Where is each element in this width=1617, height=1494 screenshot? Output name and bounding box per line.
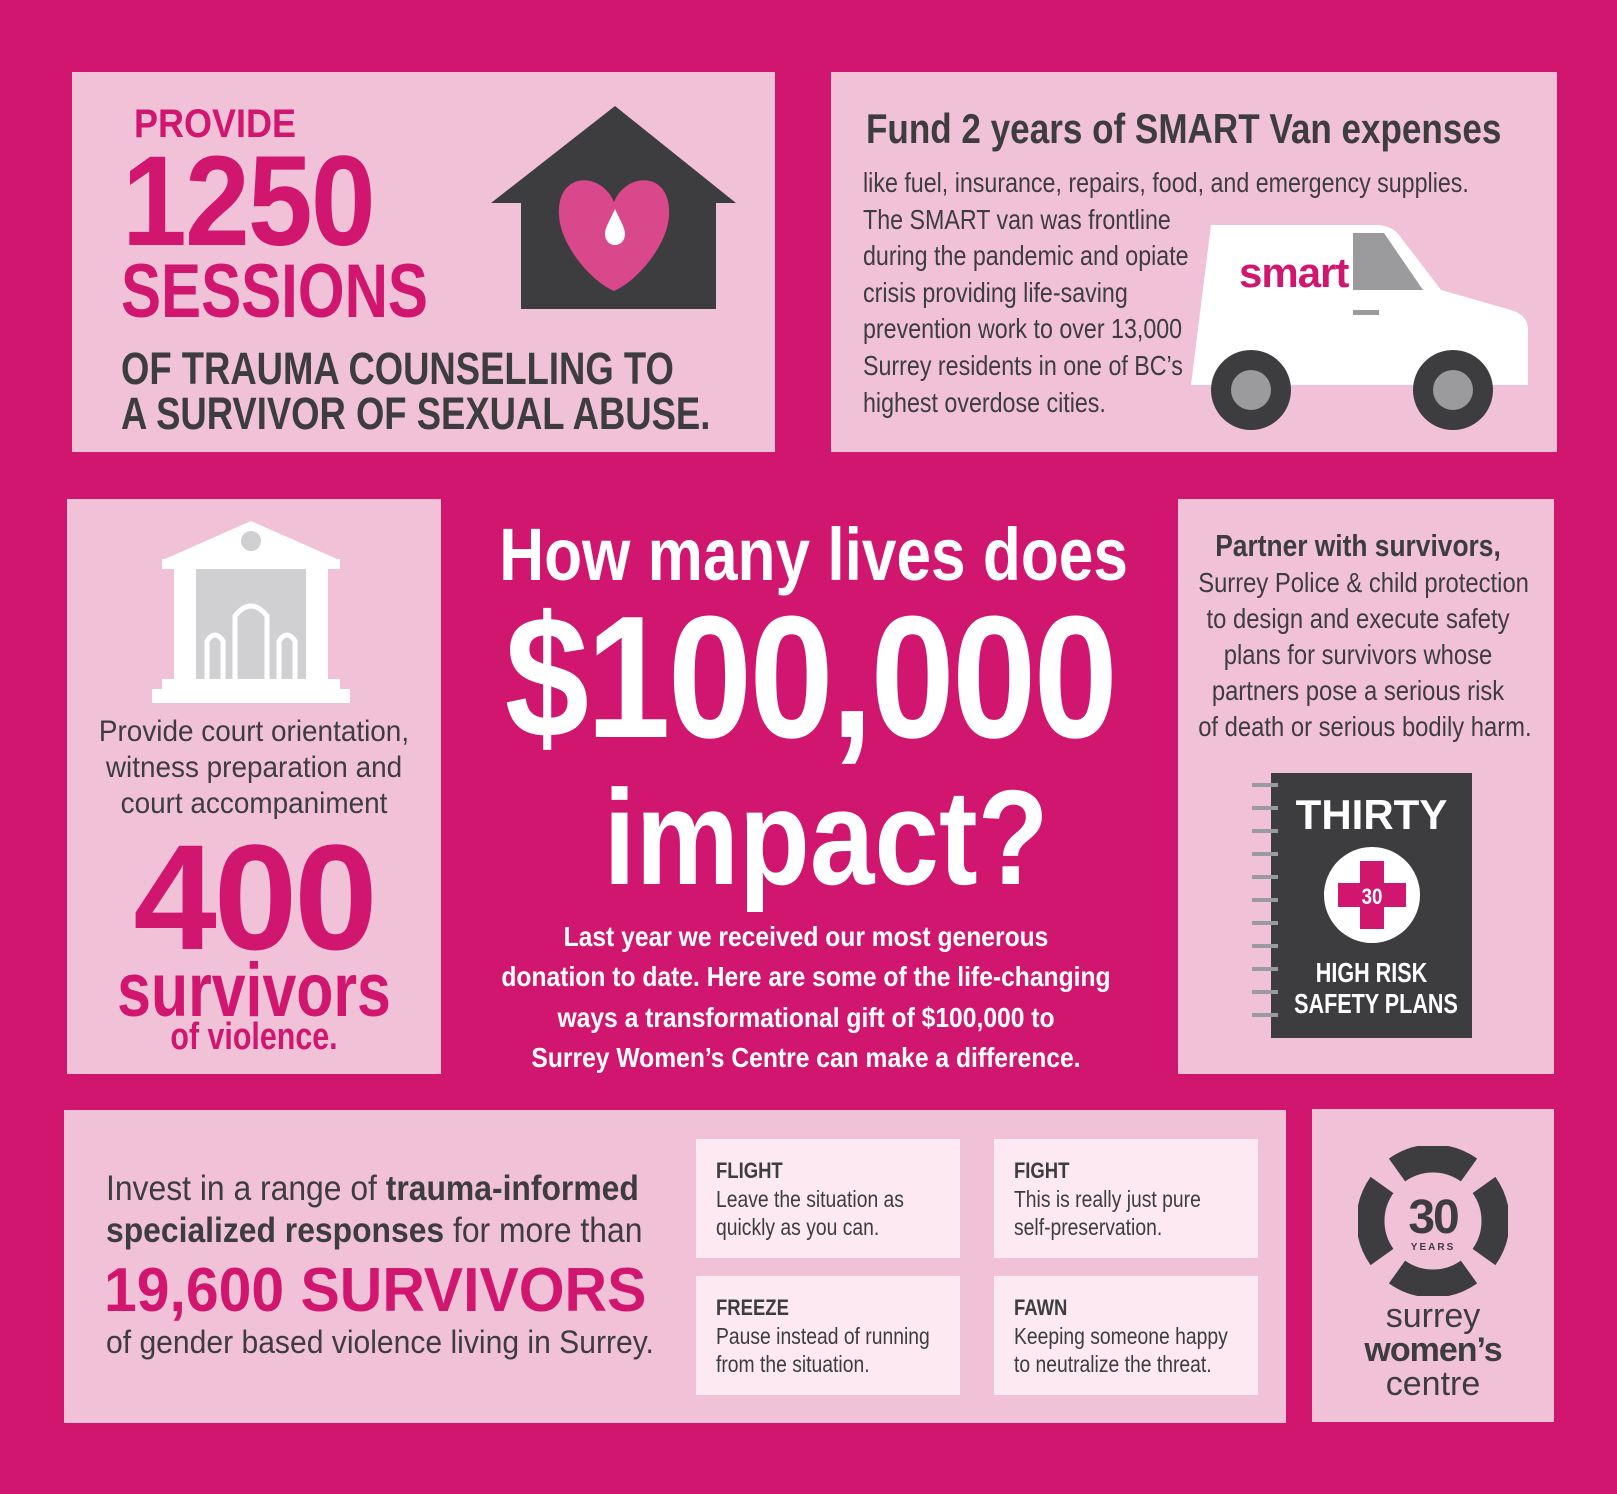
icon: house with heart — [491, 106, 736, 309]
box: fawn: FAWN — [1014, 1295, 1067, 1320]
panel: 1250 sessions — [72, 72, 775, 452]
text: intro paragraph: ways a transformational gift of $100,000 to — [557, 1002, 1055, 1033]
icon: courthouse — [152, 521, 350, 703]
icon: cross 30: 30 — [1362, 886, 1382, 909]
box: flight — [696, 1139, 960, 1258]
panel: logo — [1312, 1109, 1554, 1422]
icon: 30 years ring: 30 — [1408, 1191, 1458, 1244]
text: van description: prevention work to over 13,000 — [863, 313, 1182, 344]
text: van description: during the pandemic and opiate — [863, 240, 1189, 271]
text: gender based violence: of gender based violence living in Surrey. — [106, 1324, 654, 1360]
text: partner with survivors: to design and execute safety — [1207, 603, 1509, 634]
text: van description: The SMART van was frontline — [863, 204, 1171, 235]
text: van description: like fuel, insurance, repairs, food, and emergency supplies. — [863, 167, 1469, 198]
panel: SMART van — [831, 72, 1557, 452]
heading: impact: impact? — [603, 762, 1049, 913]
text: partner with survivors: of death or serious bodily harm. — [1198, 711, 1532, 742]
text: survivors of violence: survivors — [117, 948, 391, 1033]
number: $100,000: $100,000 — [505, 579, 1115, 774]
box: flight: FLIGHT — [716, 1158, 783, 1183]
text: surrey women's centre — [1364, 1297, 1502, 1403]
text: trauma counselling: A SURVIVOR OF SEXUAL ABUSE. — [121, 388, 710, 439]
box: fawn: Keeping someone happy — [1014, 1323, 1228, 1349]
number: 400: 400 — [133, 813, 375, 981]
title: center headline: How many lives does — [499, 513, 1128, 596]
text: van description: crisis providing life-saving — [863, 277, 1128, 308]
text: trauma counselling — [121, 343, 710, 439]
icon: 30 years ring — [1358, 1146, 1508, 1296]
text: partner with survivors: Surrey Police & child protection — [1198, 567, 1529, 598]
text: partner with survivors: Partner with survivors, — [1215, 528, 1501, 563]
text: intro paragraph: Surrey Women’s Centre can make a difference. — [531, 1042, 1081, 1073]
text: partner with survivors — [1198, 528, 1532, 742]
text: surrey women's centre: women’s — [1364, 1331, 1502, 1369]
text: court orientation: Provide court orientation, — [99, 715, 409, 748]
box: freeze: FREEZE — [716, 1295, 789, 1320]
number: 19,600 survivors: 19,600 SURVIVORS — [104, 1256, 646, 1325]
text: intro paragraph: Last year we received our most generous — [564, 921, 1048, 952]
panel: court support: of violence. — [170, 1016, 338, 1058]
text: high risk safety plans — [1294, 957, 1458, 1019]
text: high risk safety plans: HIGH RISK — [1316, 957, 1427, 988]
box: fight: self-preservation. — [1014, 1214, 1162, 1240]
text: high risk safety plans: SAFETY PLANS — [1294, 988, 1458, 1019]
text: van description — [863, 167, 1469, 418]
icon: cross 30 — [1324, 847, 1420, 943]
box: freeze — [696, 1276, 960, 1395]
text: thirty: THIRTY — [1296, 791, 1447, 838]
panel: court support — [67, 499, 441, 1074]
text: invest — [106, 1169, 642, 1250]
heading: fund smart van: Fund 2 years of SMART Van expenses — [866, 105, 1501, 152]
icon: 30 years ring: YEARS — [1411, 1242, 1455, 1253]
box: flight: quickly as you can. — [716, 1214, 879, 1240]
icon: smart van: smart — [1239, 249, 1349, 296]
text: court orientation: court accompaniment — [121, 787, 387, 820]
text: trauma counselling: OF TRAUMA COUNSELLING TO — [121, 343, 674, 394]
text: van description: Surrey residents in one of BC’s — [863, 350, 1183, 381]
icon: smart van — [1191, 225, 1528, 430]
box: fight: This is really just pure — [1014, 1186, 1201, 1212]
box: freeze: from the situation. — [716, 1351, 870, 1377]
box: fight: FIGHT — [1014, 1158, 1069, 1183]
text: surrey women's centre: surrey — [1386, 1297, 1480, 1335]
text: partner with survivors: plans for survivors whose — [1224, 639, 1492, 670]
text: van description: highest overdose cities. — [863, 387, 1106, 418]
box: fawn — [994, 1276, 1258, 1395]
panel: trauma-informed responses — [64, 1110, 1286, 1423]
icon: safety plans notebook — [1252, 773, 1472, 1038]
text: invest: Invest in a range of trauma-informed — [106, 1169, 639, 1208]
text: court orientation: witness preparation and — [106, 751, 402, 784]
box: fight — [994, 1139, 1258, 1258]
text: invest: specialized responses for more than — [106, 1211, 642, 1250]
box: flight: Leave the situation as — [716, 1186, 904, 1212]
text: partner with survivors: partners pose a serious risk — [1212, 675, 1504, 706]
box: fawn: to neutralize the threat. — [1014, 1351, 1212, 1377]
box: freeze: Pause instead of running — [716, 1323, 930, 1349]
heading: provide: PROVIDE — [134, 102, 296, 146]
panel: safety plans — [1178, 499, 1554, 1074]
text: intro paragraph — [501, 921, 1111, 1073]
heading: sessions: SESSIONS — [121, 249, 428, 334]
number: 1250: 1250 — [122, 130, 374, 273]
text: court orientation — [99, 715, 409, 820]
text: surrey women's centre: centre — [1386, 1365, 1480, 1403]
text: intro paragraph: donation to date. Here are some of the life-changing — [501, 961, 1111, 992]
